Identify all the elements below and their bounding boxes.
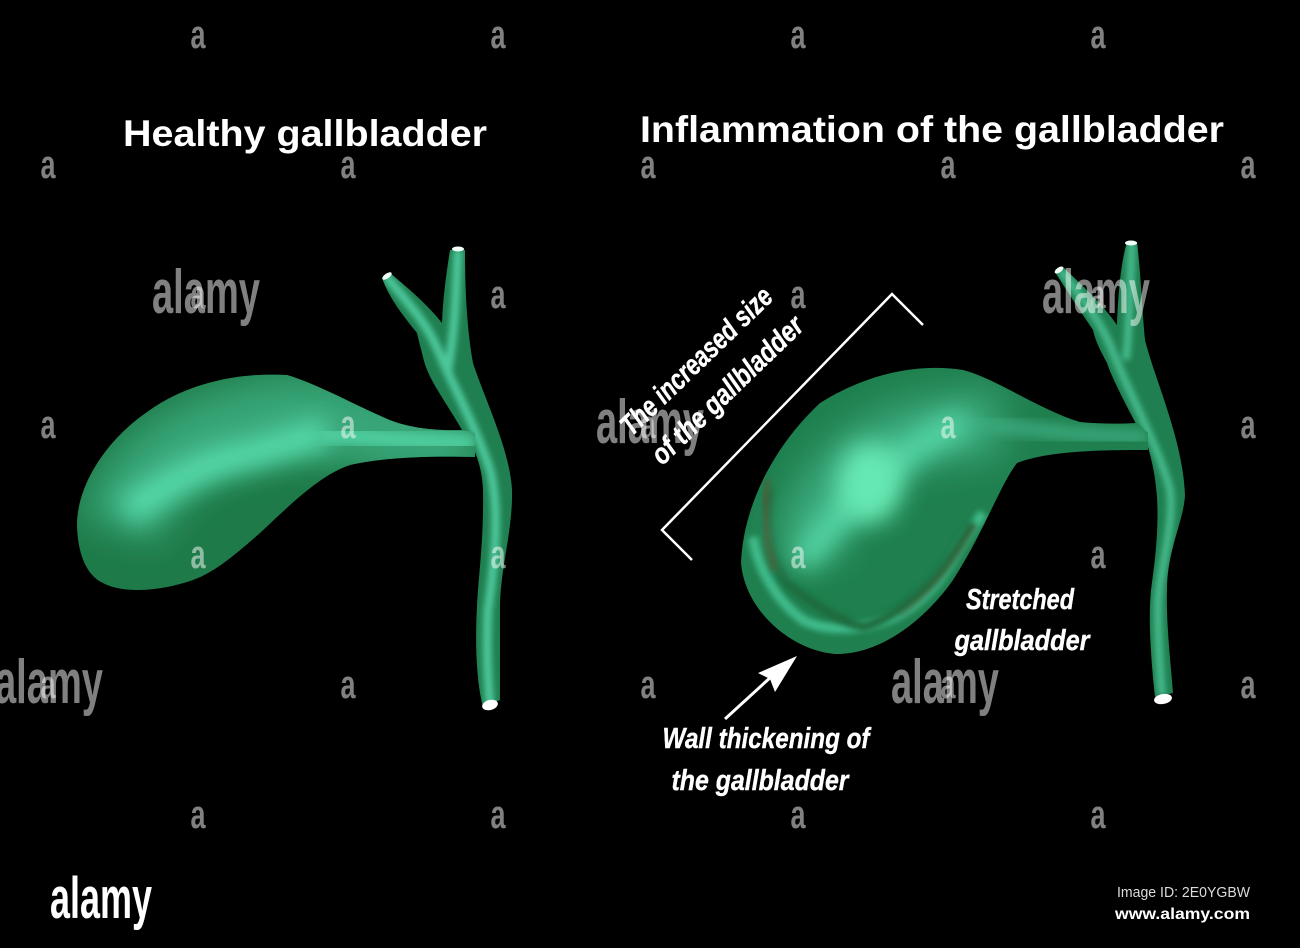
watermark grid: a — [640, 663, 656, 707]
inflamed gallbladder illustration — [735, 235, 1195, 705]
inflamed bile ducts — [1056, 242, 1185, 697]
healthy gallbladder sac — [77, 374, 475, 590]
watermark grid: a — [790, 13, 806, 57]
healthy gallbladder illustration — [70, 240, 520, 720]
watermark grid: a — [490, 273, 506, 317]
inflamed duct end cap — [1153, 693, 1173, 705]
alamy logo: alamy — [50, 866, 152, 931]
watermark grid: a — [340, 143, 356, 187]
label: increased size: of the gallbladder — [645, 309, 811, 471]
watermark grid: a — [1240, 663, 1256, 707]
inner sac body — [805, 425, 1000, 555]
fold shading — [768, 490, 973, 627]
watermark grid: a — [940, 403, 956, 447]
label: wall thickening: Wall thickening of — [662, 723, 872, 755]
healthy bile ducts — [382, 250, 512, 705]
arrow to wall — [725, 656, 797, 719]
wall highlight — [753, 513, 983, 628]
inner sac highlight — [800, 422, 965, 565]
inflammation heading: Inflammation of the gallbladder — [640, 109, 1224, 150]
watermark grid: a — [190, 533, 206, 577]
watermark grid: a — [340, 403, 356, 447]
large watermarks: alamy — [1042, 258, 1150, 327]
watermark grid: a — [1090, 13, 1106, 57]
watermark grid: a — [940, 143, 956, 187]
large watermarks — [0, 258, 1150, 717]
watermark grid: a — [40, 143, 56, 187]
watermark grid: a — [40, 403, 56, 447]
inflamed side duct cap — [1053, 265, 1065, 275]
watermark grid: a — [190, 793, 206, 837]
large watermarks: alamy — [891, 648, 999, 717]
watermark grid: a — [790, 273, 806, 317]
watermark grid: a — [490, 13, 506, 57]
watermark grid: a — [1240, 143, 1256, 187]
healthy gallbladder heading: Healthy gallbladder — [123, 113, 487, 154]
watermark grid: a — [940, 663, 956, 707]
large watermarks: alamy — [596, 388, 704, 457]
watermark grid: a — [190, 13, 206, 57]
label: wall thickening — [662, 723, 872, 797]
watermark grid: a — [640, 403, 656, 447]
watermark grid: a — [40, 663, 56, 707]
watermark grid: a — [1240, 403, 1256, 447]
healthy duct top cap — [452, 246, 464, 252]
watermark grid: a — [1090, 793, 1106, 837]
watermark grid: a — [790, 533, 806, 577]
watermark grid: a — [490, 533, 506, 577]
inflamed duct top cap — [1125, 240, 1137, 246]
healthy duct end cap — [481, 698, 499, 712]
inflamed gallbladder sac — [735, 360, 1155, 660]
watermark grid: a — [340, 663, 356, 707]
healthy side duct cap — [381, 271, 393, 281]
watermark grid: a — [1090, 273, 1106, 317]
watermark grid: a — [1090, 533, 1106, 577]
label: stretched gallbladder — [954, 584, 1091, 657]
watermark grid: a — [490, 793, 506, 837]
label: increased size: The increased size — [614, 281, 779, 442]
watermark grid: a — [190, 273, 206, 317]
large watermarks: alamy — [152, 258, 260, 327]
size bracket — [662, 294, 923, 560]
watermark grid: a — [790, 793, 806, 837]
label: wall thickening: the gallbladder — [672, 765, 850, 797]
label: stretched gallbladder: gallbladder — [954, 625, 1091, 657]
large watermarks: alamy — [0, 648, 103, 717]
image id: Image ID: 2E0YGBW — [1117, 884, 1251, 901]
label: stretched gallbladder: Stretched — [966, 584, 1075, 616]
watermark grid: a — [640, 143, 656, 187]
website: www.alamy.com — [1114, 906, 1250, 923]
